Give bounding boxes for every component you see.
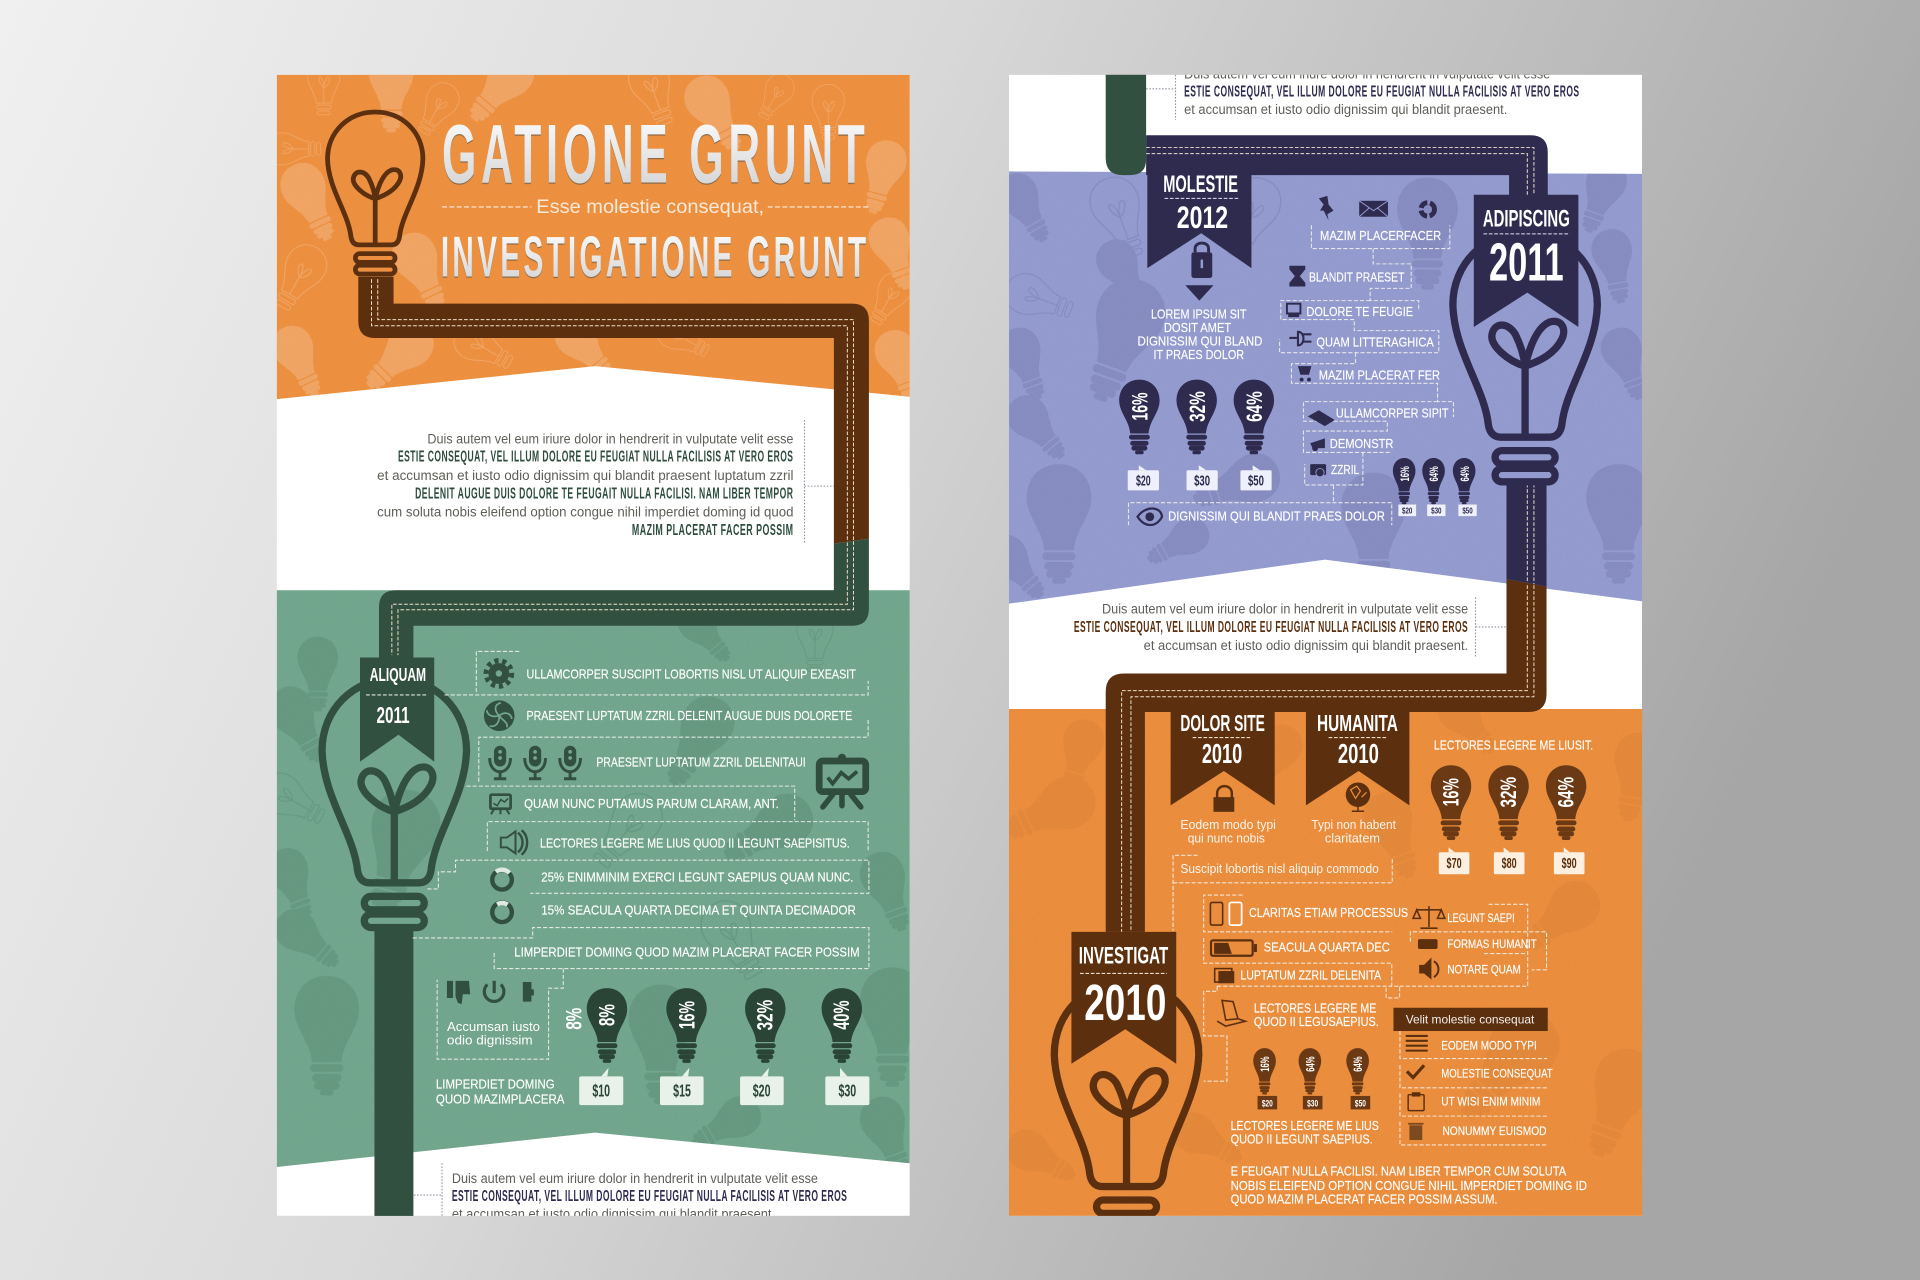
- faint bulb pattern: orange header: [276, 74, 910, 397]
- price tag $30: [825, 1068, 869, 1105]
- pipe: green end: [1106, 75, 1146, 175]
- price tags small purple: $30: [1431, 506, 1442, 516]
- price tags small brown: $50: [1355, 1098, 1366, 1108]
- list item: claritas: CLARITAS ETIAM PROCESSUS: [1249, 905, 1408, 920]
- caption: accumsan: [447, 1019, 540, 1047]
- icon: plug: [1289, 332, 1311, 345]
- list item: mazim placerat: MAZIM PLACERAT FER: [1319, 368, 1440, 383]
- caption: limperdiet doming: QUOD MAZIMPLACERA: [436, 1091, 565, 1106]
- icon: camera: [1310, 464, 1326, 477]
- title block: [441, 107, 869, 290]
- icon: battery: [1211, 940, 1257, 956]
- chart: bulb 16% purple: 16%: [1127, 392, 1152, 421]
- list item: legunt saepi: LEGUNT SAEPI: [1447, 912, 1515, 925]
- caption: eodem modo: Eodem modo typi: [1180, 817, 1276, 832]
- icon: presentation board large: [819, 754, 866, 807]
- text block: intro: Duis autem vel eum iriure dolor in hendrerit in vulputate velit esse: [427, 431, 793, 446]
- list item: quam litteraghica: QUAM LITTERAGHICA: [1316, 335, 1434, 350]
- text block: intro: MAZIM PLACERAT FACER POSSIM: [632, 522, 793, 539]
- chart: bulb 32% brown: [1488, 765, 1529, 840]
- faint bulb pattern: purple band: [1009, 174, 1642, 599]
- list item: ullamcorper sipit: ULLAMCORPER SIPIT: [1336, 406, 1449, 421]
- caption: limperdiet doming: LIMPERDIET DOMING: [436, 1077, 555, 1092]
- caption: lorem ipsum: DIGNISSIM QUI BLAND: [1138, 333, 1262, 348]
- chart: bulb 32% brown: 32%: [1496, 777, 1521, 808]
- text block: left sheet footer: [414, 1163, 847, 1221]
- price tag $10: $10: [592, 1081, 610, 1101]
- icon: investigat bulb: [1054, 982, 1199, 1231]
- icon: small battery: [1418, 939, 1438, 949]
- ribbon: Investigat 2010: 2010: [1084, 973, 1166, 1031]
- chart: bulb 16% brown: 16%: [1438, 778, 1463, 806]
- price tags small purple: [1398, 504, 1477, 516]
- text block: left sheet footer: et accumsan et iusto odio dignissim qui blandit praesent.: [452, 1206, 775, 1221]
- orange header band: [277, 75, 910, 399]
- text block: e feugait: QUOD MAZIM PLACERAT FACER POSSIM ASSUM.: [1231, 1192, 1498, 1207]
- caption: lectores legere me lius: QUOD II LEGUNT SAEPIUS.: [1231, 1132, 1373, 1147]
- box: velit molestie: Velit molestie consequat: [1406, 1013, 1535, 1027]
- icon: microphones: [490, 746, 581, 779]
- list item: limperdiet: LIMPERDIET DOMING QUOD MAZIM PLACERAT FACER POSSIM: [514, 944, 860, 959]
- icon: photos: [1215, 969, 1234, 983]
- text block: right sheet top: ESTIE CONSEQUAT, VEL ILLUM DOLORE EU FEUGIAT NULLA FACILISIS AT VERO EROS: [1184, 84, 1580, 101]
- chart: small purple bulbs: [1393, 458, 1475, 504]
- title: line 2: INVESTIGATIONE GRUNT: [441, 226, 869, 290]
- green band: [277, 590, 910, 1167]
- text block: left sheet footer: ESTIE CONSEQUAT, VEL ILLUM DOLORE EU FEUGIAT NULLA FACILISIS AT VERO EROS: [452, 1188, 847, 1205]
- text block: middle right sheet: Duis autem vel eum iriure dolor in hendrerit in vulputate velit esse: [1102, 601, 1468, 616]
- chart: small brown bulbs: [1253, 1048, 1369, 1094]
- list item: lectores: LECTORES LEGERE ME LIUS QUOD II LEGUNT SAEPISITUS.: [540, 835, 850, 850]
- price tag $80: [1494, 847, 1524, 874]
- caption: lorem ipsum: DOSIT AMET: [1164, 320, 1231, 335]
- icon: monitor: [1287, 304, 1300, 317]
- ribbon: Humanita 2010: HUMANITA: [1317, 710, 1398, 736]
- list item: suscipit: Suscipit lobortis nisl aliquip commodo: [1180, 862, 1379, 876]
- icon: scales: [1413, 906, 1445, 928]
- price tag $10: [579, 1068, 623, 1105]
- icon: adipiscing bulb: [1453, 233, 1597, 482]
- list item: ullamcorper: ULLAMCORPER SUSCIPIT LOBORTIS NISL UT ALIQUIP EXEASIT: [527, 666, 856, 681]
- icon: globe: [1346, 782, 1370, 811]
- list item: dolore: DOLORE TE FEUGIE: [1307, 304, 1413, 319]
- icon: green bulb: [322, 678, 467, 928]
- caption: lectores legere me lius: LECTORES LEGERE ME LIUS: [1231, 1118, 1379, 1133]
- caption: accumsan: odio dignissim: [447, 1032, 533, 1047]
- caption: accumsan: Accumsan iusto: [447, 1019, 540, 1034]
- pipe: navy top: [1146, 135, 1548, 196]
- panel: left sheet: [277, 75, 910, 1216]
- fabric texture: [277, 75, 1642, 1216]
- caption: eodem modo: [1180, 817, 1276, 845]
- text block: right sheet top: Duis autem vel eum iriure dolor in hendrerit in vulputate velit esse: [1184, 66, 1550, 81]
- dashed connectors: orange list: [1173, 855, 1547, 1145]
- price tags small brown: $30: [1307, 1098, 1318, 1108]
- list item: praesent 2: PRAESENT LUPTATUM ZZRIL DELENITAUI: [596, 755, 806, 770]
- text block: right sheet top: et accumsan et iusto odio dignissim qui blandit praesent.: [1184, 102, 1507, 117]
- text block: e feugait: NOBIS ELEIFEND OPTION CONGUE NIHIL IMPERDIET DOMING ID: [1231, 1178, 1587, 1193]
- list item: lectores legere: QUOD II LEGUSAEPIUS.: [1254, 1014, 1379, 1029]
- list item: nonummy: NONUMMY EUISMOD: [1442, 1125, 1547, 1138]
- panel: right sheet: [1009, 75, 1642, 1216]
- list item: lectores legere: LECTORES LEGERE ME: [1254, 1001, 1377, 1016]
- dashed connectors: purple list: [1128, 225, 1453, 525]
- caption: typi non habent: Typi non habent: [1311, 817, 1396, 832]
- price tag $20 purple: [1128, 465, 1159, 490]
- chart: small purple bulbs: 64%: [1428, 466, 1441, 482]
- price tag $20: [740, 1068, 784, 1105]
- chart: small brown bulbs: 64%: [1352, 1056, 1365, 1072]
- chart: bulb 40%: [822, 988, 862, 1063]
- icon: padlock brown: [1213, 786, 1234, 812]
- icon: trash: [1408, 1123, 1423, 1140]
- price tag $90: [1554, 847, 1584, 874]
- icon: progress ring 25%: [492, 870, 512, 890]
- icon: header bulb: [328, 112, 423, 274]
- price tag $90: $90: [1562, 856, 1577, 872]
- ribbon: Aliquam 2011: ALIQUAM: [370, 664, 426, 685]
- price tag $70: $70: [1447, 856, 1462, 872]
- icon: padlock: [1191, 243, 1212, 278]
- caption: eodem modo: qui nunc nobis: [1188, 830, 1265, 845]
- ribbon: Adipiscing 2011: 2011: [1489, 232, 1564, 292]
- icons: pin, envelope, recycle: [1319, 196, 1434, 220]
- pipe: navy lower: [1506, 484, 1547, 587]
- chart: bulb 64% brown: 64%: [1553, 777, 1578, 808]
- ribbon: Dolor Site 2010: DOLOR SITE: [1180, 710, 1265, 736]
- list item: notare: NOTARE QUAM: [1447, 963, 1521, 976]
- chart: bulb 8%: 8%: [595, 1004, 620, 1026]
- price tag $30: $30: [838, 1081, 856, 1101]
- price tag $15: [660, 1068, 704, 1105]
- ribbon: Dolor Site 2010: 2010: [1202, 738, 1242, 769]
- text block: intro: ESTIE CONSEQUAT, VEL ILLUM DOLORE EU FEUGIAT NULLA FACILISIS AT VERO EROS: [398, 449, 793, 466]
- price tag $30 purple: [1187, 465, 1218, 490]
- box: velit molestie: [1393, 1008, 1548, 1031]
- chart: bulb 40%: 40%: [829, 1000, 854, 1030]
- price tag $50 purple: [1240, 465, 1272, 490]
- icon: progress ring 15%: [492, 902, 512, 922]
- icon: check: [1407, 1065, 1424, 1078]
- pipe: green connector: [379, 539, 869, 658]
- icon: lines: [1406, 1036, 1428, 1051]
- price tag $80: $80: [1502, 856, 1517, 872]
- ribbon: Humanita 2010: 2010: [1338, 738, 1379, 769]
- ribbon: Investigat 2010: INVESTIGAT: [1079, 943, 1168, 970]
- price tags small brown: [1258, 1096, 1370, 1109]
- text block: middle right sheet: ESTIE CONSEQUAT, VEL ILLUM DOLORE EU FEUGIAT NULLA FACILISIS AT VERO EROS: [1074, 619, 1468, 636]
- price tag $15: $15: [673, 1081, 691, 1101]
- icon: hourglass: [1289, 266, 1305, 287]
- subtitle: Esse molestie consequat,: [536, 197, 764, 218]
- ribbon: Dolor Site 2010: [1171, 710, 1275, 805]
- caption: lorem ipsum: LOREM IPSUM SIT: [1151, 306, 1247, 321]
- text block: right sheet top: [1146, 74, 1579, 120]
- text block: middle right sheet: et accumsan et iusto odio dignissim qui blandit praesent.: [1144, 638, 1468, 653]
- chart: bulb 32%: 32%: [753, 1000, 778, 1030]
- list item: dignissim: DIGNISSIM QUI BLANDIT PRAES DOLOR: [1168, 508, 1385, 523]
- icon: eye: [1138, 508, 1162, 525]
- chart: bulb 16% purple: [1119, 380, 1160, 454]
- list item: 15%: 15% SEACULA QUARTA DECIMA ET QUINTA DECIMADOR: [541, 903, 856, 918]
- chart: bulb 64% purple: [1234, 380, 1274, 454]
- faint bulb pattern: green band: [276, 626, 910, 1163]
- text block: intro: cum soluta nobis eleifend option congue nihil imperdiet doming id quod: [377, 505, 793, 520]
- chart: bulb 16% brown: [1431, 765, 1471, 840]
- text block: intro: et accumsan et iusto odio dignissim qui blandit praesent luptatum zzril: [377, 468, 793, 483]
- list item: blandit: BLANDIT PRAESET: [1309, 270, 1405, 285]
- list item: 25%: 25% ENIMMINIM EXERCI LEGUNT SAEPIUS QUAM NUNC.: [541, 870, 853, 885]
- caption: lorem ipsum: [1138, 306, 1262, 362]
- icon: down arrow: [1185, 285, 1213, 301]
- chart: small purple bulbs: 16%: [1399, 466, 1412, 482]
- label: 8% outside: 8%: [562, 1007, 587, 1030]
- text block: e feugait: [1231, 1164, 1587, 1207]
- icon: speaker: [501, 830, 527, 855]
- ribbon: Humanita 2010: [1306, 710, 1409, 805]
- list item: demonstr: DEMONSTR: [1330, 436, 1393, 451]
- chart: bulb 16%: 16%: [674, 1001, 699, 1029]
- list item: zzril: ZZRIL: [1331, 462, 1359, 477]
- caption: lorem ipsum: IT PRAES DOLOR: [1153, 347, 1244, 362]
- chart: bulb 64% purple: 64%: [1242, 391, 1267, 422]
- list item: eodem: EODEM MODO TYPI: [1441, 1039, 1537, 1052]
- ribbon: Molestie 2012: MOLESTIE: [1163, 171, 1238, 198]
- ribbon: Adipiscing 2011: [1474, 195, 1578, 327]
- price tags small brown: $20: [1262, 1098, 1273, 1108]
- list item: formas: FORMAS HUMANIT: [1447, 938, 1537, 951]
- dashed connectors: green list: [413, 651, 869, 1059]
- pipe: green lower: [374, 931, 413, 1216]
- price tag $20 purple: $20: [1136, 474, 1151, 490]
- icon: megaphone: [1310, 438, 1325, 451]
- chart: bulb 32% purple: 32%: [1185, 391, 1210, 422]
- icon: calculator: [1308, 410, 1335, 426]
- chart: small purple bulbs: 64%: [1459, 466, 1472, 482]
- list item: mazim placerfacer: MAZIM PLACERFACER: [1320, 228, 1441, 243]
- ribbon: Molestie 2012: 2012: [1177, 199, 1228, 235]
- title: line 1: GATIONE GRUNT: [442, 107, 869, 200]
- ribbon: Aliquam 2011: 2011: [377, 702, 410, 728]
- price tag $20: $20: [753, 1081, 771, 1101]
- list item: quam nunc: QUAM NUNC PUTAMUS PARUM CLARAM, ANT.: [524, 796, 779, 811]
- chart: bulb 32% purple: [1176, 380, 1217, 454]
- orange footer band: [1009, 709, 1642, 1216]
- price tags small purple: $20: [1402, 506, 1413, 516]
- price tag $50 purple: $50: [1248, 474, 1264, 490]
- ribbon: Adipiscing 2011: ADIPISCING: [1483, 206, 1570, 233]
- caption: typi non habent: [1311, 817, 1396, 845]
- chart: bulb 16%: [666, 988, 707, 1063]
- list item: luptatum: LUPTATUM ZZRIL DELENITA: [1240, 968, 1382, 983]
- chart: bulb 64% brown: [1546, 765, 1586, 840]
- pipe: brown lower: [1106, 579, 1547, 932]
- icon: gear: [486, 661, 512, 686]
- text block: e feugait: E FEUGAIT NULLA FACILISI. NAM LIBER TEMPOR CUM SOLUTA: [1231, 1164, 1566, 1179]
- purple band: [1009, 171, 1642, 604]
- icons: thumb, power, lighter: [447, 981, 534, 1004]
- chart: bulb 8%: [587, 988, 627, 1063]
- faint bulb pattern: orange footer: [994, 682, 1667, 1194]
- caption: lectores legere me lius: [1231, 1118, 1379, 1147]
- chart: bulb 32%: [745, 988, 786, 1063]
- price tag $70: [1439, 847, 1469, 874]
- price tags small purple: $50: [1462, 506, 1473, 516]
- icon: laptop: [1217, 1000, 1245, 1026]
- pipe: brown top: [358, 277, 869, 544]
- text block: intro: [377, 420, 834, 544]
- chart: small brown bulbs: 64%: [1304, 1056, 1317, 1072]
- price tag $30 purple: $30: [1194, 474, 1210, 490]
- ribbon: Aliquam 2011: [360, 658, 434, 762]
- icon: speaker brown: [1419, 958, 1438, 980]
- icon: clipboard: [1408, 1092, 1424, 1111]
- list item: lectores legere: [1254, 1001, 1379, 1029]
- ribbon: Investigat 2010: [1071, 932, 1176, 1064]
- list item: seacula: SEACULA QUARTA DEC: [1264, 939, 1390, 954]
- caption: typi non habent: claritatem: [1325, 830, 1380, 845]
- text block: middle right sheet: [1074, 598, 1507, 658]
- list item: praesent 1: PRAESENT LUPTATUM ZZRIL DELENIT AUGUE DUIS DOLORETE: [527, 708, 853, 723]
- icon: phones: [1210, 902, 1242, 925]
- ribbon: Molestie 2012: [1147, 171, 1251, 268]
- icon: fan: [484, 700, 515, 731]
- heading: lectores legere: LECTORES LEGERE ME LIUSIT.: [1434, 737, 1593, 752]
- text block: intro: DELENIT AUGUE DUIS DOLORE TE FEUGAIT NULLA FACILISI. NAM LIBER TEMPOR: [415, 485, 793, 502]
- chart: small brown bulbs: 16%: [1259, 1056, 1272, 1072]
- icon: presentation board small: [490, 795, 511, 814]
- icon: cart: [1298, 366, 1311, 382]
- text block: left sheet footer: Duis autem vel eum iriure dolor in hendrerit in vulputate velit esse: [452, 1171, 818, 1186]
- caption: limperdiet doming: [436, 1077, 565, 1106]
- list item: molestie: MOLESTIE CONSEQUAT: [1441, 1068, 1553, 1081]
- list item: ut wisi: UT WISI ENIM MINIM: [1441, 1096, 1540, 1109]
